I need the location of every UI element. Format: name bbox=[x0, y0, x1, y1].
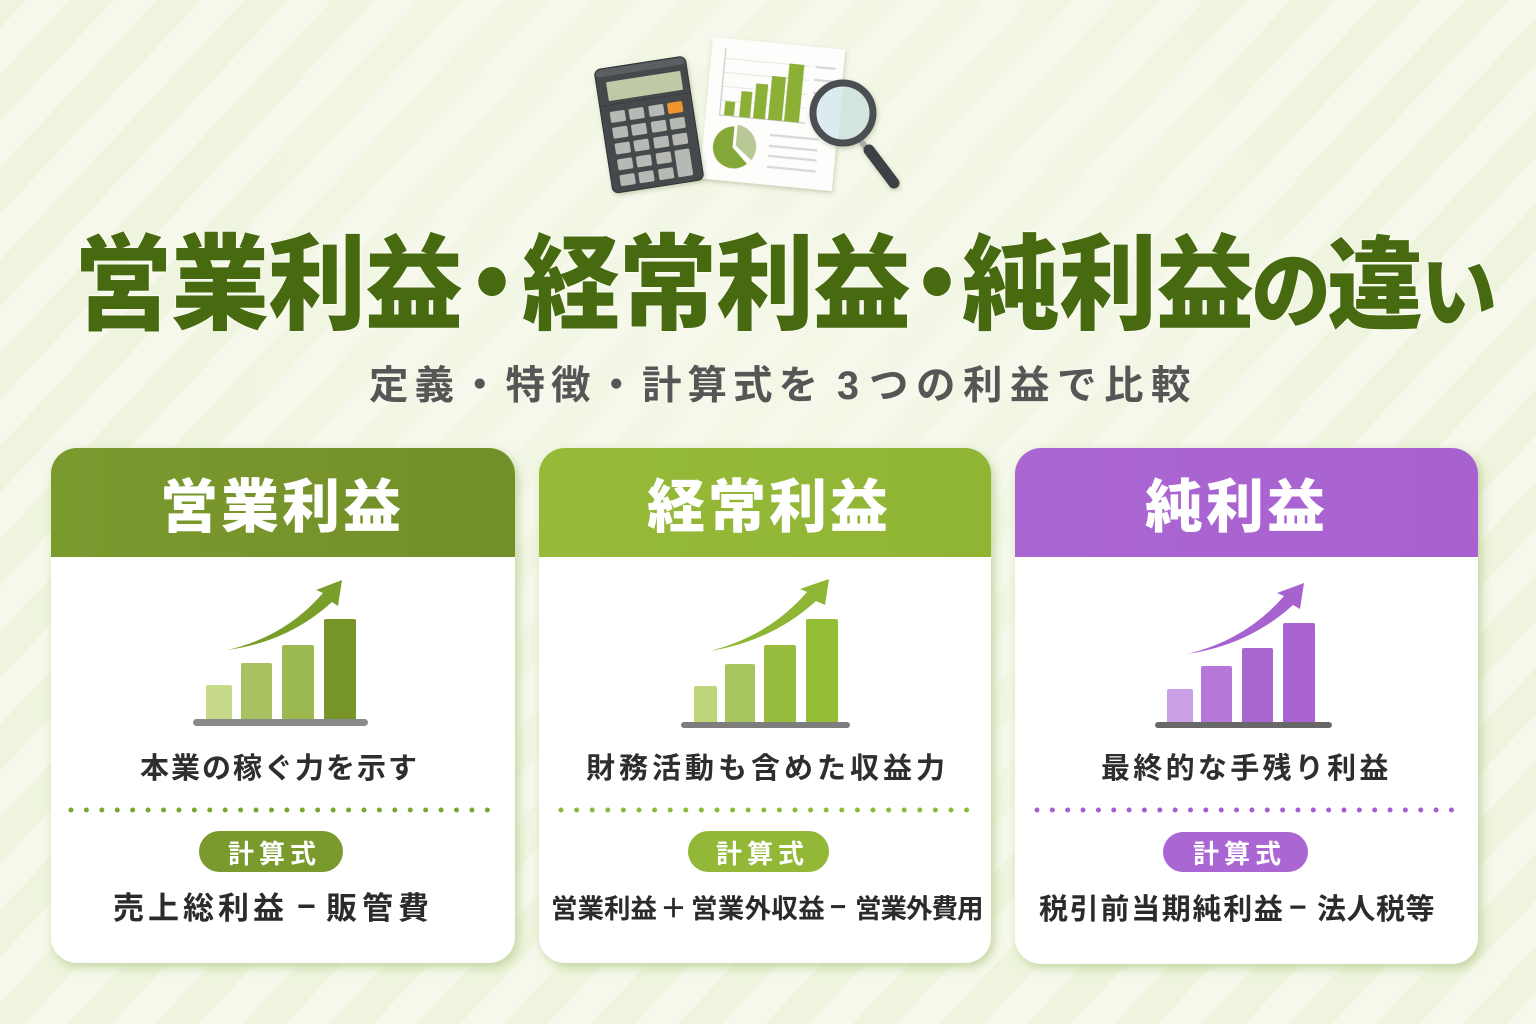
formula badge bbox=[199, 831, 343, 872]
description: 財務活動も含めた収益力 bbox=[586, 752, 949, 785]
description: 本業の稼ぐ力を示す bbox=[140, 752, 419, 785]
title: 営業利益 bbox=[74, 228, 462, 344]
panel: 経常利益 bbox=[539, 448, 991, 963]
title: 違 bbox=[1327, 228, 1423, 343]
panel header: 純利益: 純利益 bbox=[1145, 475, 1328, 540]
formula: 販管費 bbox=[326, 891, 434, 926]
formula: − bbox=[1289, 891, 1307, 924]
formula bbox=[551, 891, 982, 924]
formula bbox=[1039, 891, 1435, 926]
formula badge: 計算式 bbox=[716, 839, 809, 869]
formula: 税引前当期純利益 bbox=[1039, 893, 1285, 926]
subtitle bbox=[369, 364, 1198, 408]
formula bbox=[113, 888, 434, 926]
subtitle: 3 bbox=[837, 364, 859, 408]
description: 最終的な手残り利益 bbox=[1101, 752, 1392, 785]
panel header: 営業利益: 営業利益 bbox=[160, 475, 404, 540]
bar chart with rising arrow bbox=[681, 579, 850, 728]
formula badge bbox=[688, 831, 829, 872]
subtitle: つの利益で比較 bbox=[869, 364, 1198, 408]
panel header: 営業利益 bbox=[51, 448, 515, 557]
formula: − bbox=[830, 891, 846, 922]
icon: calculator bbox=[594, 56, 704, 194]
panel header: 純利益 bbox=[1015, 448, 1478, 557]
formula: 営業外収益 bbox=[691, 894, 825, 924]
formula badge: 計算式 bbox=[228, 839, 321, 869]
panel header: 経常利益 bbox=[539, 448, 991, 557]
icon: report sheet bbox=[699, 37, 845, 191]
panel: 純利益 bbox=[1015, 448, 1478, 964]
title bbox=[74, 228, 1497, 344]
title: 経常利益 bbox=[522, 228, 910, 344]
title: ・ bbox=[888, 228, 986, 344]
title: ・ bbox=[443, 228, 541, 344]
formula: ＋ bbox=[660, 894, 687, 924]
panel header: 経常利益: 経常利益 bbox=[647, 475, 891, 540]
icon: calculator, report and magnifying glass bbox=[594, 37, 894, 194]
icon: magnifying glass bbox=[813, 83, 894, 183]
bar chart with rising arrow bbox=[193, 580, 368, 726]
formula: 法人税等 bbox=[1317, 893, 1435, 926]
formula: 売上総利益 bbox=[113, 891, 288, 926]
subtitle: 定義・特徴・計算式を bbox=[369, 364, 824, 408]
formula: 営業外費用 bbox=[855, 894, 982, 924]
bar chart with rising arrow bbox=[1155, 583, 1332, 728]
title: い bbox=[1421, 248, 1497, 338]
formula badge bbox=[1163, 832, 1308, 872]
title: の bbox=[1251, 245, 1331, 340]
title: 純利益 bbox=[962, 228, 1253, 344]
formula badge: 計算式 bbox=[1193, 839, 1286, 869]
formula: 営業利益 bbox=[551, 894, 657, 924]
formula: − bbox=[297, 888, 316, 924]
panel: 営業利益 bbox=[51, 448, 515, 963]
